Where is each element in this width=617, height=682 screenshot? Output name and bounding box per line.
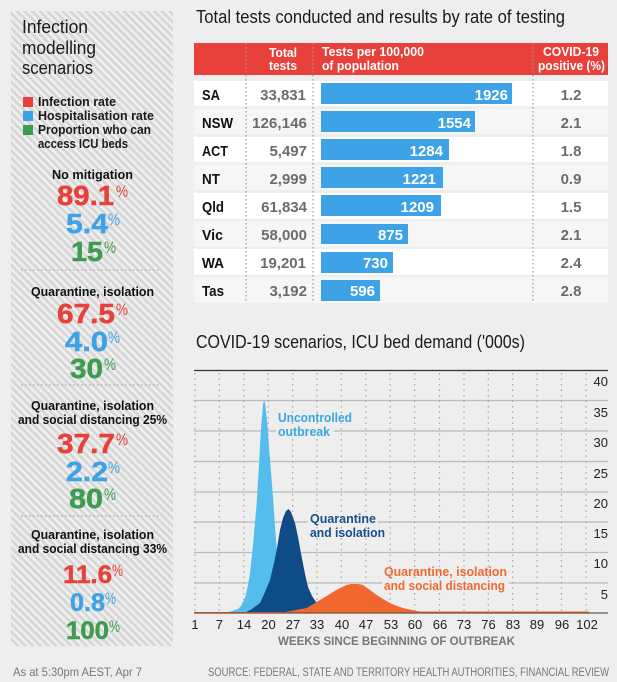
chart title: COVID-19 scenarios, ICU bed demand ('000s) (196, 332, 525, 352)
row: Vic: 58,000 (261, 227, 307, 244)
legend (23, 95, 154, 151)
label: quarantine, isolation and social distancing: and social distancing (384, 579, 505, 593)
label: quarantine and isolation: Quarantine (310, 512, 376, 526)
row: NT: 2,999 (269, 171, 307, 188)
row: Qld: 1.5 (561, 199, 581, 216)
row: NSW: 2.1 (561, 115, 581, 132)
scenario: social distancing 25%: % (116, 431, 128, 449)
scenario: no mitigation: 5.4 (66, 208, 108, 239)
table header: COVID-19 (543, 45, 599, 59)
row: ACT: 5,497 (269, 143, 307, 160)
scenario: social distancing 25%: and social distancing 25% (18, 413, 167, 427)
scenario: quarantine, isolation: Quarantine, isolation (31, 285, 154, 299)
area: quarantine, isolation and social distancing (194, 584, 589, 613)
panel heading: Infection (22, 17, 88, 37)
legend: Infection rate (38, 95, 116, 109)
row: Tas: 2.8 (561, 283, 581, 300)
scenario: quarantine, isolation (31, 285, 154, 384)
scenario: no mitigation: % (116, 183, 128, 201)
x axis labels: 47 (359, 617, 373, 632)
table header: Tests per 100,000 (322, 45, 424, 59)
row: NT: 1221 (403, 171, 436, 188)
x axis labels: 1 (191, 617, 199, 632)
row: ACT: 1.8 (561, 143, 581, 160)
panel heading: modelling (22, 38, 96, 58)
x axis labels: 14 (237, 617, 251, 632)
scenario: social distancing 33%: % (112, 562, 123, 580)
row: WA: 730 (363, 255, 388, 272)
scenario: no mitigation: % (108, 211, 120, 229)
legend: Proportion who can (38, 123, 151, 137)
scenario: no mitigation: 89.1 (57, 180, 114, 211)
x axis labels: 66 (433, 617, 447, 632)
panel heading: scenarios (22, 58, 93, 78)
scenario: social distancing 25%: 37.7 (57, 428, 115, 459)
scenario: social distancing 25%: 80 (69, 483, 103, 514)
legend: access ICU beds (38, 137, 128, 151)
x axis labels: 7 (216, 617, 223, 632)
row: NSW: NSW (202, 115, 234, 132)
scenario: social distancing 25% (18, 399, 167, 514)
scenario: social distancing 33%: Quarantine, isolation (31, 528, 154, 542)
row: Qld: Qld (202, 199, 224, 216)
row: NT: NT (202, 171, 220, 188)
y axis labels: 25 (594, 466, 608, 481)
y axis labels: 15 (594, 526, 608, 541)
label: quarantine and isolation: and isolation (310, 526, 385, 540)
scenario: quarantine, isolation: 4.0 (65, 326, 108, 357)
x axis labels: 27 (286, 617, 300, 632)
row: Tas: 3,192 (269, 283, 307, 300)
row: ACT: 1284 (410, 143, 444, 160)
y axis labels: 10 (594, 556, 608, 571)
row: Vic: 2.1 (561, 227, 581, 244)
row: Tas: 596 (350, 283, 375, 300)
panel heading (22, 17, 96, 78)
row: Qld: 1209 (401, 199, 434, 216)
scenario: social distancing 33% (18, 528, 167, 645)
row: Vic: Vic (202, 227, 223, 244)
table title: Total tests conducted and results by rate of testing (196, 7, 565, 27)
y axis labels: 40 (594, 374, 608, 389)
scenario: no mitigation (52, 168, 133, 267)
area chart: ICU bed demand (191, 370, 608, 648)
x axis labels: 76 (481, 617, 496, 632)
row: WA: 19,201 (260, 255, 306, 272)
x axis labels: 53 (384, 617, 398, 632)
y axis labels: 30 (594, 435, 608, 450)
scenario: social distancing 25%: 2.2 (66, 456, 108, 487)
scenario: quarantine, isolation: % (104, 356, 116, 374)
y axis labels: 20 (594, 496, 608, 511)
row: SA: 33,831 (260, 87, 306, 104)
row: SA: 1.2 (561, 87, 581, 104)
table: tests by rate of testing (194, 43, 608, 303)
scenario: quarantine, isolation: 30 (70, 353, 103, 384)
label: uncontrolled outbreak: outbreak (278, 425, 330, 439)
row: Qld: 61,834 (261, 199, 308, 216)
table header: positive (%) (538, 59, 605, 73)
y axis labels: 35 (594, 405, 608, 420)
scenario: social distancing 33%: % (109, 618, 120, 636)
x axis labels: 96 (555, 617, 569, 632)
row: ACT: ACT (202, 143, 228, 160)
row: SA: 1926 (475, 87, 508, 104)
x axis labels: 20 (261, 617, 276, 632)
x axis labels: 102 (576, 617, 598, 632)
table header: of population (322, 59, 399, 73)
row: WA: 2.4 (561, 255, 582, 272)
scenario: quarantine, isolation: 67.5 (57, 298, 115, 329)
row: SA: SA (202, 87, 220, 104)
scenario: social distancing 33%: % (105, 590, 116, 608)
row: Vic: 875 (378, 227, 403, 244)
row: Tas (202, 280, 581, 301)
row: NT (202, 167, 581, 188)
row: SA (202, 83, 581, 104)
scenario: social distancing 25%: % (108, 459, 120, 477)
x axis title: WEEKS SINCE BEGINNING OF OUTBREAK (278, 634, 515, 648)
scenario: no mitigation: No mitigation (52, 168, 133, 182)
scenario: quarantine, isolation: % (108, 329, 120, 347)
x axis labels: 40 (335, 617, 349, 632)
scenario: social distancing 33%: 0.8 (70, 589, 105, 617)
x axis labels (191, 617, 598, 632)
scenario: social distancing 25%: Quarantine, isolation (31, 399, 154, 413)
row: NSW (202, 111, 581, 132)
row: NSW: 126,146 (252, 115, 307, 132)
x axis labels: 60 (408, 617, 422, 632)
table header: tests (269, 59, 297, 73)
label: quarantine, isolation and social distancing (382, 565, 509, 593)
label: uncontrolled outbreak: Uncontrolled (278, 411, 352, 425)
panel: infection modelling scenarios (11, 11, 173, 646)
scenario: quarantine, isolation: % (116, 301, 128, 319)
scenario: no mitigation: 15 (71, 236, 103, 267)
row: NSW: 1554 (438, 115, 472, 132)
scenario: social distancing 33%: and social distancing 33% (18, 542, 167, 556)
area: uncontrolled outbreak (225, 400, 285, 612)
table header (194, 43, 608, 75)
row: WA (202, 252, 582, 273)
timestamp note: As at 5:30pm AEST, Apr 7 (13, 665, 142, 679)
row: Vic (202, 224, 581, 244)
label: quarantine and isolation (308, 512, 385, 540)
y axis labels (594, 374, 608, 602)
row: Qld (202, 195, 581, 216)
scenario: social distancing 33%: 100 (66, 617, 109, 645)
row: NT: 0.9 (561, 171, 581, 188)
x axis labels: 83 (506, 617, 520, 632)
label: uncontrolled outbreak (276, 411, 352, 439)
scenario: social distancing 33%: 11.6 (63, 561, 112, 589)
x axis labels: 73 (457, 617, 471, 632)
x axis labels: 89 (530, 617, 544, 632)
area: quarantine and isolation (245, 509, 330, 612)
scenario: no mitigation: % (104, 239, 116, 257)
table header: Total (269, 46, 297, 60)
x axis labels: 33 (310, 617, 324, 632)
row: ACT (202, 139, 581, 160)
legend: Hospitalisation rate (38, 109, 154, 123)
row: Tas: Tas (202, 283, 224, 300)
y axis labels: 5 (601, 587, 608, 602)
row: WA: WA (202, 255, 224, 272)
scenario: social distancing 25%: % (104, 486, 116, 504)
label: quarantine, isolation and social distancing: Quarantine, isolation (384, 565, 507, 579)
